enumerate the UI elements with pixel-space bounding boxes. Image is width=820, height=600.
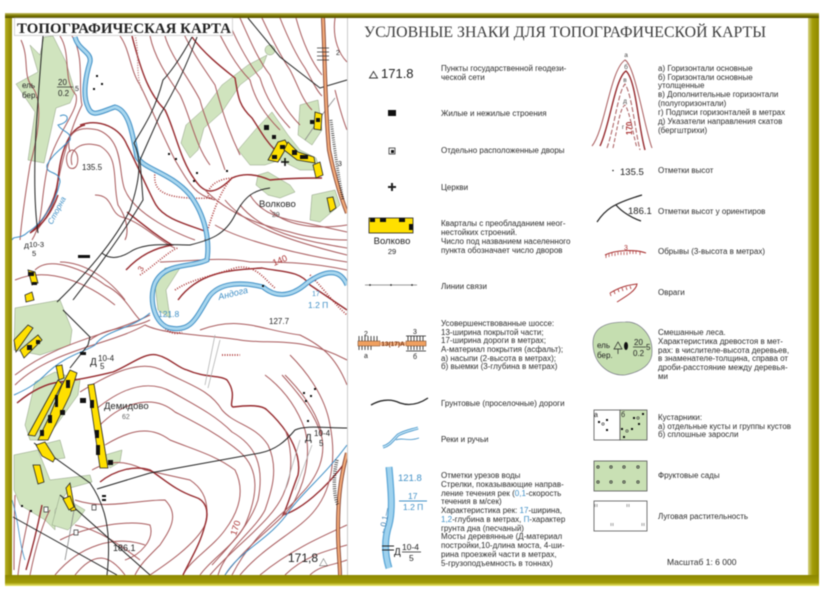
- legend: contour lines: в) Дополнительные горизонтали: [658, 90, 778, 99]
- legend: water marks: постройки,10-длина моста, 4-ши-: [441, 541, 565, 550]
- map labels: 0.2: [58, 89, 70, 98]
- map labels: 140: [271, 253, 289, 268]
- map labels: 170: [228, 519, 243, 537]
- legend: communication lines: [365, 282, 487, 291]
- map labels: 127.7: [269, 317, 290, 326]
- legend: ravines: [610, 284, 685, 302]
- legend: blocks: нестойких строений.: [441, 228, 517, 237]
- legend: cliffs: 3: [624, 245, 628, 252]
- legend: highways: 13(17)А: [381, 341, 405, 348]
- map labels: Д: [90, 357, 97, 368]
- legend: mixed forest: дроби-расстояние между деревья-: [658, 363, 788, 372]
- map labels: 5: [319, 439, 324, 448]
- map labels: 10-4: [314, 429, 331, 438]
- map labels: 171,8: [288, 551, 318, 565]
- map labels: 3: [338, 161, 342, 168]
- map labels: д: [24, 240, 29, 250]
- legend: spot heights: 135.5: [620, 167, 644, 178]
- legend: shrubs: а) отдельные кусты и группы кустов: [658, 422, 791, 431]
- ravines and cliffs: [135, 35, 347, 355]
- legend: mixed forest: 20: [634, 338, 643, 347]
- legend: mixed forest: 5: [646, 343, 651, 352]
- panel: topographic map: [12, 18, 347, 575]
- legend: shrubs: б: [621, 411, 625, 419]
- legend: contour lines: 170: [625, 121, 634, 135]
- legend: geodetic network: 171.8: [381, 66, 414, 81]
- map labels: 10-4: [98, 354, 115, 363]
- legend: water marks: ление течения рек (0,1-скорость: [441, 489, 561, 498]
- legend: water marks: 17: [408, 491, 418, 501]
- legend: mixed forest: 0.2: [633, 349, 645, 358]
- legend: landmark heights: Отметки высот у ориентиров: [658, 207, 765, 216]
- legend: water marks: течения в м/сек): [441, 497, 502, 506]
- legend: geodetic network: Пункты государственной геодези-: [441, 64, 567, 73]
- legend: yards: Отдельно расположенные дворы: [441, 146, 565, 155]
- legend: highways: а: [364, 353, 368, 360]
- legend: highways: Усовершенствованные шоссе:: [441, 319, 554, 328]
- legend: contour lines: (бергштрихи): [658, 126, 707, 135]
- map labels: 5: [75, 86, 79, 93]
- map labels: ель: [22, 81, 35, 90]
- legend: mixed forest: рах: в числителе-высота деревьев,: [658, 346, 789, 355]
- map labels: △: [319, 558, 328, 568]
- legend: contour lines: утолщенные: [658, 81, 705, 90]
- legend: highways: а) насыпи (2-высота в метрах);: [441, 354, 556, 363]
- map labels: бер.: [22, 91, 38, 100]
- legend: mixed forest: ель: [597, 341, 610, 350]
- map labels: Демидово: [104, 401, 149, 412]
- legend: highways: А-материал покрытия (асфальт);: [441, 345, 563, 354]
- legend: buildings: [388, 109, 547, 118]
- legend: highways: 17-ширина дороги в метрах;: [441, 336, 546, 345]
- map labels: 2: [336, 50, 340, 57]
- legend: water marks: 5-грузоподъемность в тоннах): [441, 559, 553, 568]
- legend: contour lines: г) Подписи горизонталей в метрах: [658, 108, 785, 117]
- legend: water marks: 10-4: [402, 542, 419, 552]
- legend: contour lines: (полугоризонтали): [658, 99, 727, 108]
- legend: orchards: Фруктовые сады: [658, 471, 720, 480]
- highway: [317, 18, 347, 575]
- legend: shrubs: б) сплошные заросли: [658, 430, 738, 439]
- legend: cliffs: Обрывы (3-высота в метрах): [658, 247, 765, 256]
- legend: mixed forest: [593, 322, 789, 381]
- map labels: 17: [312, 291, 320, 298]
- legend: churches: [388, 183, 468, 192]
- legend: highways: 13-ширина покрытой части;: [441, 328, 544, 337]
- legend: contour lines: б) Горизонтали основные: [658, 73, 753, 82]
- legend: spot heights: Отметки высот: [658, 166, 714, 175]
- legend: mixed forest: Характеристика древостоя в мет-: [658, 337, 783, 346]
- legend: dirt roads: [371, 398, 565, 408]
- legend: blocks: Волково: [374, 236, 410, 247]
- legend: water marks: 1,2-глубина в метрах, П-характер: [441, 515, 566, 524]
- contour lines: [14, 18, 347, 575]
- legend: spot heights: [612, 166, 714, 178]
- legend: rivers and streams: Реки и ручьи: [441, 435, 488, 444]
- legend: cliffs: [605, 245, 765, 258]
- legend: water marks: рина проезжей части в метрах,: [441, 550, 557, 559]
- legend: communication lines: Линии связи: [441, 282, 487, 291]
- legend: blocks: [369, 218, 571, 256]
- legend: blocks: пункта обозначает число дворов: [441, 246, 563, 255]
- legend: geodetic network: ческой сети: [441, 73, 485, 82]
- legend: water marks: Стрелки, показывающие направ-: [441, 480, 564, 489]
- legend: contour lines: б: [624, 63, 628, 71]
- legend: contour lines: д) Указатели направления скатов: [658, 117, 782, 126]
- map labels: 10-3: [29, 240, 44, 249]
- legend: blocks: Кварталы с преобладанием неог-: [441, 219, 566, 228]
- map labels: 1.2 П: [308, 300, 328, 310]
- legend: highways: [358, 319, 563, 371]
- legend: contour lines: в: [623, 77, 627, 84]
- legend: meadow: [594, 501, 748, 531]
- legend: highways: б: [413, 353, 417, 361]
- legend: landmark heights: 186.1: [628, 206, 652, 217]
- legend: water marks: 121.8: [398, 473, 422, 484]
- forest and orchard areas: [14, 36, 340, 530]
- legend: contour lines: [592, 52, 785, 150]
- map labels: 5: [32, 249, 36, 258]
- legend: mixed forest: бер.: [597, 351, 613, 360]
- legend: blocks: 29: [388, 247, 396, 256]
- map labels: 62: [122, 414, 130, 421]
- map labels: 135.5: [82, 163, 103, 172]
- legend: rivers and streams: [383, 428, 488, 447]
- legend: contour lines: г: [622, 124, 625, 131]
- legend: orchards: [594, 461, 720, 491]
- legend: shrubs: Кустарники:: [658, 413, 702, 422]
- legend: contour lines: а: [624, 52, 628, 59]
- legend: dirt roads: Грунтовые (проселочные) дороги: [441, 399, 565, 408]
- legend: water marks: Отметки урезов воды: [441, 471, 521, 480]
- legend: landmark heights: [597, 195, 765, 222]
- legend: water marks: 5: [409, 553, 414, 563]
- legend: buildings: Жилые и нежилые строения: [441, 109, 547, 118]
- legend: churches: Церкви: [441, 183, 468, 192]
- map labels: 121.8: [158, 309, 180, 319]
- map labels: 3: [136, 264, 146, 273]
- map title: ТОПОГРАФИЧЕСКАЯ КАРТА: [17, 21, 232, 37]
- legend: ravines: Овраги: [658, 288, 685, 297]
- legend: shrubs: [594, 410, 791, 440]
- legend heading: УСЛОВНЫЕ ЗНАКИ ДЛЯ ТОПОГРАФИЧЕСКОЙ КАРТЫ: [364, 22, 766, 41]
- legend: highways: 3: [413, 329, 417, 336]
- roads and communication lines: [13, 18, 347, 575]
- legend: geodetic network: [370, 64, 567, 82]
- legend: contour lines: д: [623, 98, 627, 105]
- legend: water marks: грунта дна (песчаный): [441, 524, 524, 533]
- rivers and streams: [12, 37, 347, 575]
- legend: mixed forest: в знаменателе-толщина, справа от: [658, 354, 788, 363]
- legend: shrubs: а: [594, 412, 598, 419]
- legend: contour lines: а) Горизонтали основные: [658, 64, 753, 73]
- legend: water marks: Характеристика рек: 17-ширина,: [441, 506, 562, 515]
- map labels: 5: [100, 362, 105, 371]
- map labels: 186.1: [113, 543, 136, 553]
- legend: blocks: Число под названием населенного: [441, 237, 571, 246]
- settlement blocks: [14, 75, 336, 535]
- legend: water marks: Мосты деревянные (Д-материал: [441, 532, 563, 541]
- legend: water marks: [377, 467, 566, 568]
- legend: highways: 2: [364, 331, 368, 338]
- scale note: Масштаб 1: 6 000: [667, 557, 737, 567]
- map labels: Сторна: [46, 195, 68, 226]
- legend: water marks: Д: [394, 547, 401, 558]
- map labels: [22, 50, 342, 568]
- legend: mixed forest: ми: [658, 372, 668, 381]
- legend: water marks: 1.2 П: [403, 502, 423, 512]
- map labels: Д: [305, 433, 312, 444]
- map labels: 29: [272, 212, 280, 219]
- map labels: 20: [58, 78, 67, 87]
- map labels: Андога: [216, 285, 249, 302]
- legend: highways: б) выемки (3-глубина в метрах): [441, 362, 558, 371]
- legend: mixed forest: Смешанные леса.: [658, 328, 726, 337]
- legend: meadow: Луговая растительность: [658, 512, 748, 521]
- legend: water marks: ←0.1—: [377, 507, 392, 535]
- map labels: Волково: [259, 199, 296, 210]
